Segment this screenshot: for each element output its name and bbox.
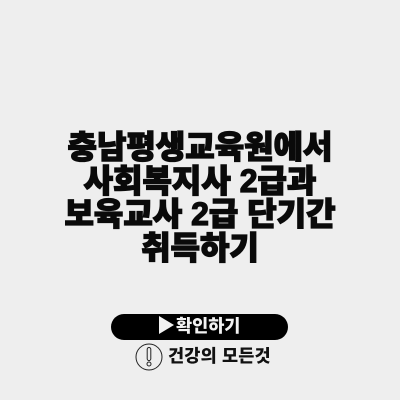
button: confirm xyxy=(111,314,288,340)
title: 충남평생교육원에서 xyxy=(68,129,332,165)
title: 보육교사 2급 단기간 xyxy=(64,196,336,232)
button label: 확인하기 xyxy=(176,316,240,336)
title xyxy=(64,129,336,266)
site name: 건강의 모든것 xyxy=(168,346,271,366)
title: 취득하기 xyxy=(141,230,259,266)
icon: play triangle xyxy=(159,316,174,334)
icon: exclamation in circle xyxy=(136,344,162,370)
title: 사회복지사 2급과 xyxy=(84,163,316,199)
